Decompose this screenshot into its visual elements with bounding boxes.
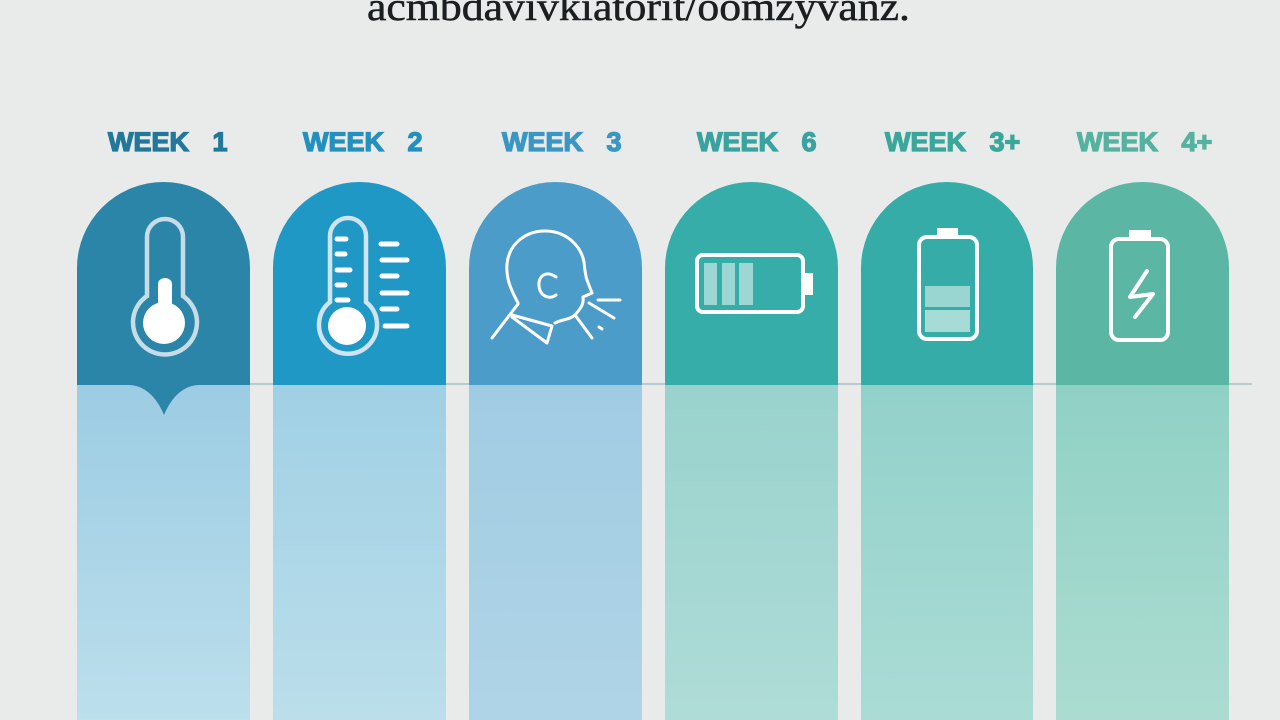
icon: thermometer low [133, 219, 197, 354]
arched header: week 1 [77, 182, 250, 415]
arched header: week 2 [273, 182, 446, 385]
icon: battery with bolt [1111, 230, 1168, 340]
arched header: week 3 [469, 182, 642, 385]
panel: week 1 [77, 127, 250, 720]
icon: horizontal battery [697, 255, 813, 312]
lower bar: week 6 [665, 385, 838, 720]
icon: coughing person [492, 231, 620, 343]
panel: week 3 [469, 127, 642, 720]
arched header: week 3+ [861, 182, 1033, 385]
lower bar: week 3+ [861, 385, 1033, 720]
panel: week 4+ [1056, 127, 1229, 720]
heading: week 3+: WEEK 3+ [885, 127, 1020, 157]
panel: week 3+ [861, 127, 1033, 720]
panel: week 6 [665, 127, 838, 720]
icon: thermometer with scale [319, 218, 407, 354]
heading: week 2: WEEK 2 [303, 127, 423, 157]
heading: week 4+: WEEK 4+ [1077, 127, 1212, 157]
panel: week 2 [273, 127, 446, 720]
arched header: week 6 [665, 182, 838, 385]
heading: week 6: WEEK 6 [697, 127, 817, 157]
icon: battery half charged [919, 228, 977, 339]
lower bar: week 2 [273, 385, 446, 720]
lower bar: week 4+ [1056, 385, 1229, 720]
heading: week 3: WEEK 3 [502, 127, 622, 157]
arched header: week 4+ [1056, 182, 1229, 385]
lower bar: week 1 [77, 385, 250, 720]
heading: week 1: WEEK 1 [108, 127, 228, 157]
lower bar: week 3 [469, 385, 642, 720]
